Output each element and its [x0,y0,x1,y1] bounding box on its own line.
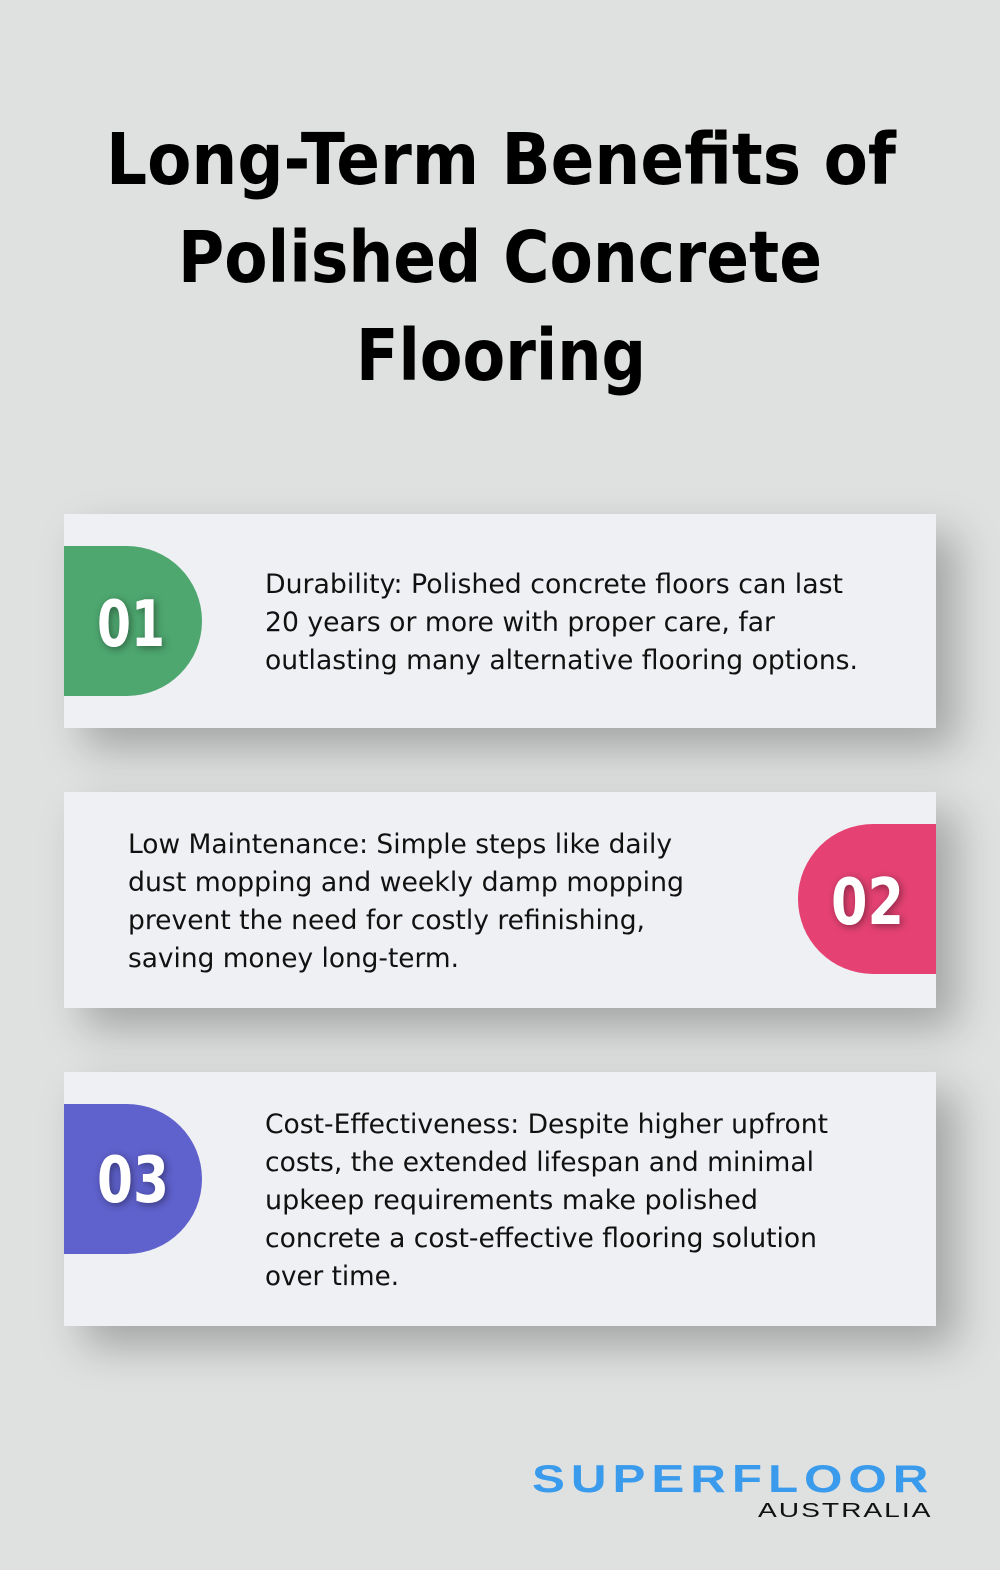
logo: AUSTRALIA [758,1500,932,1522]
text: cost-effectiveness: costs, the extended lifespan and minimal [265,1147,814,1178]
badge: 02 [798,824,936,974]
text: cost-effectiveness: upkeep requirements make polished [265,1185,758,1216]
number 01: 01 [97,588,165,662]
title: Polished Concrete [178,216,822,299]
text: cost-effectiveness: over time. [265,1261,399,1292]
title [106,118,897,397]
text: low maintenance: prevent the need for costly refinishing, [128,905,645,936]
title: Long-Term Benefits of [106,118,897,201]
text: cost-effectiveness: Cost-Effectiveness: Despite higher upfront [265,1109,828,1140]
title: Flooring [356,314,646,397]
text: durability: outlasting many alternative flooring options. [265,645,858,676]
number 02: 02 [831,866,904,940]
text: cost-effectiveness: concrete a cost-effective flooring solution [265,1223,817,1254]
text: durability: 20 years or more with proper care, far [265,607,776,638]
logo: SUPERFLOOR [532,1458,934,1501]
text: low maintenance: saving money long-term. [128,943,459,974]
panel: cost-effectiveness [64,1072,936,1326]
panel: low maintenance [64,792,936,1008]
panel: durability [64,514,936,728]
text: low maintenance: Low Maintenance: Simple steps like daily [128,829,672,860]
text: durability: Durability: Polished concrete floors can last [265,569,843,600]
badge: 01 [64,546,202,696]
number 03: 03 [97,1144,169,1218]
text: low maintenance: dust mopping and weekly damp mopping [128,867,684,898]
badge: 03 [64,1104,202,1254]
